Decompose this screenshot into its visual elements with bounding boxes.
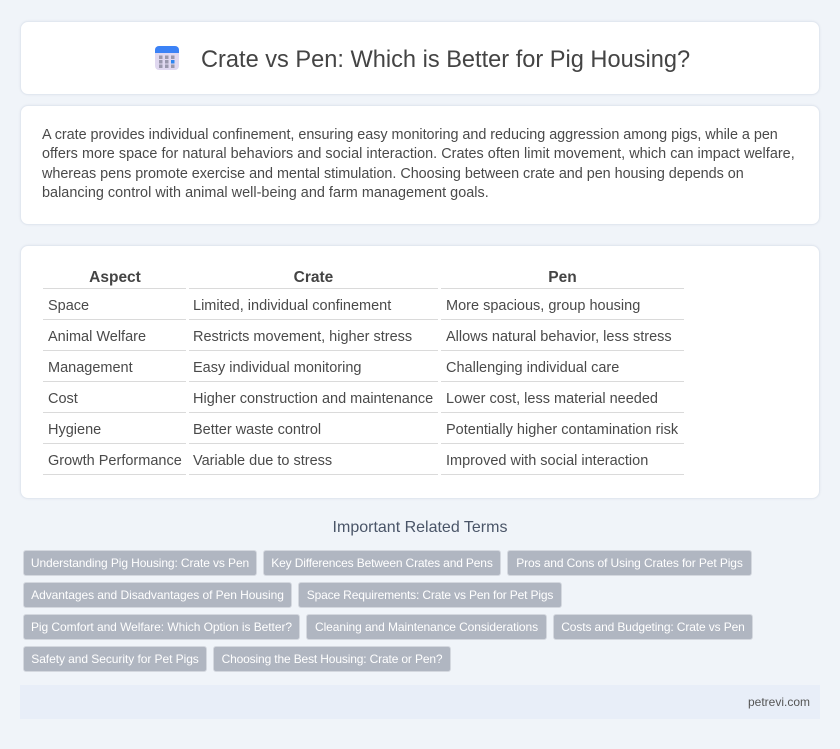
table header: Aspect: Aspect	[89, 269, 141, 286]
comparison table: Improved with social interaction	[446, 453, 648, 469]
comparison table: More spacious, group housing	[446, 298, 640, 314]
footer source: petrevi.com	[748, 695, 810, 709]
tag: Key Differences Between Crates and Pens	[271, 556, 493, 570]
comparison table: Variable due to stress	[193, 453, 332, 469]
tag: Safety and Security for Pet Pigs	[31, 652, 199, 666]
header panel	[20, 21, 820, 95]
comparison table: Lower cost, less material needed	[446, 391, 658, 407]
comparison table: Easy individual monitoring	[193, 360, 361, 376]
tag	[23, 646, 207, 672]
comparison table: Potentially higher contamination risk	[446, 422, 678, 438]
tag	[263, 550, 501, 576]
comparison table: Higher construction and maintenance	[193, 391, 433, 407]
footer bar	[20, 685, 820, 719]
intro paragraph: A crate provides individual confinement, ensuring easy monitoring and reducing aggression among pigs, while a pen	[42, 127, 778, 143]
tag: Space Requirements: Crate vs Pen for Pet Pigs	[307, 588, 553, 602]
tag: Advantages and Disadvantages of Pen Housing	[31, 588, 284, 602]
intro paragraph	[42, 127, 795, 201]
row: Management: Management	[48, 360, 133, 376]
row: Space: Space	[48, 298, 89, 314]
intro paragraph: balancing control with animal well-being and farm management goals.	[42, 185, 489, 201]
tag	[553, 614, 753, 640]
comparison table: Allows natural behavior, less stress	[446, 329, 672, 345]
tag: Pig Comfort and Welfare: Which Option is Better?	[31, 620, 292, 634]
tag	[306, 614, 547, 640]
tag	[23, 614, 300, 640]
row: Hygiene: Hygiene	[48, 422, 101, 438]
comparison table: Challenging individual care	[446, 360, 619, 376]
tag: Costs and Budgeting: Crate vs Pen	[561, 620, 745, 634]
table header: Crate: Crate	[294, 269, 333, 286]
comparison table: Better waste control	[193, 422, 321, 438]
tag	[507, 550, 752, 576]
tag: Cleaning and Maintenance Considerations	[315, 620, 538, 634]
title: Crate vs Pen: Which is Better for Pig Housing?	[201, 47, 690, 73]
panel: comparison table	[20, 245, 820, 499]
row: Growth Performance: Growth Performance	[48, 453, 182, 469]
comparison table: Restricts movement, higher stress	[193, 329, 412, 345]
panel: introduction text	[20, 105, 820, 225]
comparison table	[43, 269, 684, 475]
table header: Pen: Pen	[548, 269, 577, 286]
tag	[23, 582, 292, 608]
row: Animal Welfare: Animal Welfare	[48, 329, 146, 345]
tag	[298, 582, 562, 608]
tag	[23, 550, 257, 576]
tag: Understanding Pig Housing: Crate vs Pen	[31, 556, 249, 570]
icon: calendar grid	[155, 46, 179, 70]
tag: Pros and Cons of Using Crates for Pet Pigs	[516, 556, 743, 570]
intro paragraph: offers more space for natural behaviors and social interaction. Crates often limit movement, which can impact welfare,	[42, 146, 795, 162]
tag	[213, 646, 451, 672]
heading: related terms: Important Related Terms	[333, 519, 507, 536]
row: Cost: Cost	[48, 391, 78, 407]
tag: Choosing the Best Housing: Crate or Pen?	[222, 652, 442, 666]
related term tags	[23, 550, 753, 672]
intro paragraph: whereas pens promote exercise and mental stimulation. Choosing between crate and pen housing depends on	[42, 166, 744, 182]
comparison table: Limited, individual confinement	[193, 298, 391, 314]
